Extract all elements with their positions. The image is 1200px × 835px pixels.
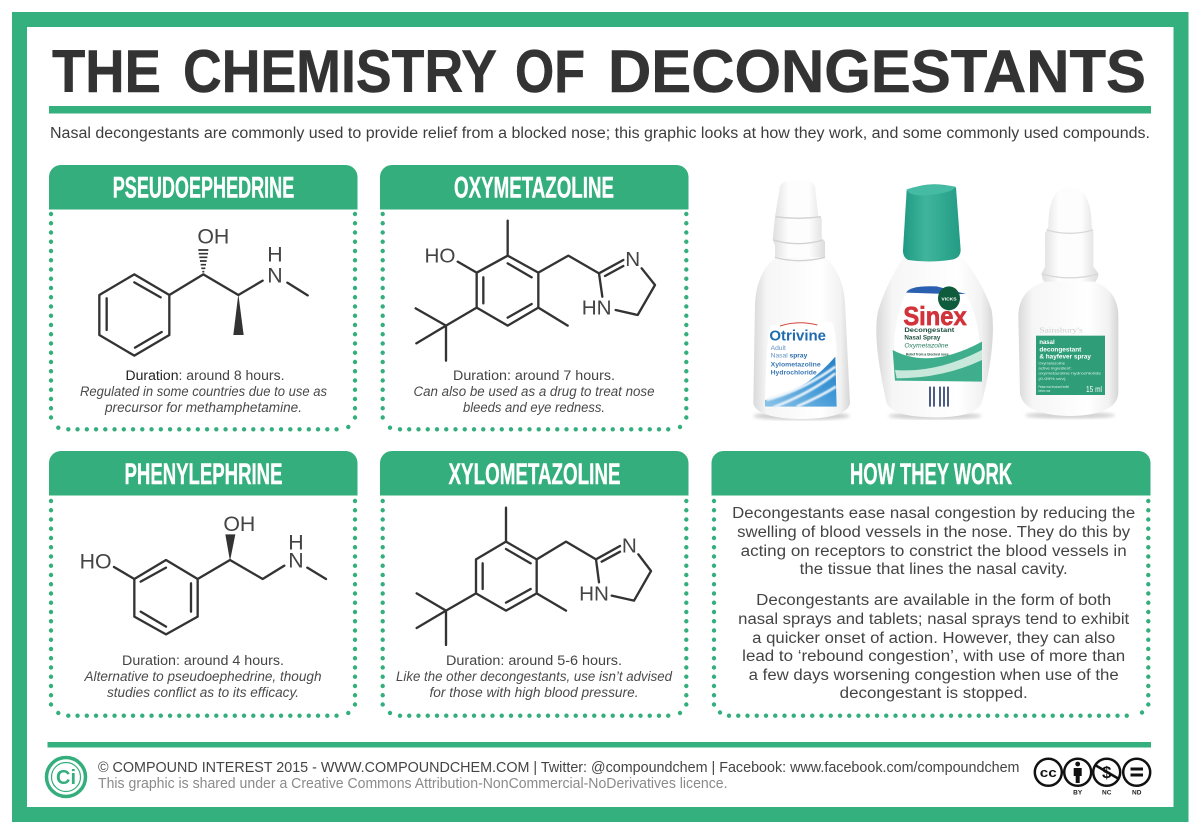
caption: phenylephrine: studies conflict as to its efficacy.: [107, 685, 299, 700]
molecule: phenylephrine: H: [288, 531, 304, 555]
heading: how they work: [712, 451, 1150, 496]
intro text: Nasal decongestants are commonly used to provide relief from a blocked nose; this graphic looks at how they work, and some commonly used compounds.: [50, 125, 1150, 142]
panel: oxymetazoline: [380, 165, 688, 429]
bottle: Otrivine: Otrivine: [769, 329, 826, 345]
heading: oxymetazoline: [380, 165, 688, 210]
panel: xylometazoline: [380, 451, 688, 716]
icon: nc: [1093, 759, 1120, 796]
icon: by: BY: [1073, 790, 1083, 796]
text block: how they work, paragraph 1: acting on receptors to constrict the blood vessels in: [741, 543, 1127, 560]
bottle: Sainsbury's: decongestant: [1039, 347, 1081, 353]
molecule: oxymetazoline: HN: [582, 297, 612, 320]
bottle: Otrivine: Hydrochloride: [771, 370, 817, 377]
bottle: Sinex: VICKS: [941, 297, 957, 303]
caption: pseudoephedrine: precursor for methamphetamine.: [104, 400, 302, 415]
bottle: Sainsbury's: & hayfever spray: [1039, 355, 1092, 361]
icon: nd: ND: [1132, 790, 1142, 796]
bottle: Sinex: Sinex: [903, 301, 967, 331]
icon: cc: cc: [1040, 765, 1057, 780]
caption: phenylephrine: [83, 653, 322, 700]
bottle: Sinex: Oxymetazoline: [904, 343, 949, 350]
text block: how they work, paragraph 1: the tissue that lines the nasal cavity.: [800, 561, 1068, 578]
caption: oxymetazoline: Duration: around 7 hours.: [453, 368, 615, 383]
title: OF: [515, 38, 585, 105]
footer credit line: © COMPOUND INTEREST 2015 - WWW.COMPOUNDCHEM.COM | Twitter: @compoundchem | Facebook: www.facebook.com/compoundchem: [98, 760, 1020, 776]
bottle: Sainsbury's: nasal: [1039, 340, 1055, 346]
bottle: Otrivine: Xylometazoline: [771, 362, 821, 369]
title: DECONGESTANTS: [608, 38, 1146, 105]
bottle: Sainsbury's: oxymetazoline hydrochloride: [1038, 371, 1102, 376]
molecule: pseudoephedrine: N: [267, 264, 283, 288]
title: CHEMISTRY: [183, 38, 497, 105]
bottle: Otrivine: Adult: [771, 345, 786, 352]
text block: how they work, paragraph 2: Decongestants are available in the form of both: [756, 592, 1111, 609]
bottle: Sinex: [876, 184, 993, 419]
caption: oxymetazoline: [414, 368, 654, 415]
bottle: Sinex: Nasal Spray: [904, 334, 941, 341]
heading: phenylephrine: PHENYLEPHRINE: [124, 458, 282, 491]
title rule: [49, 106, 1151, 114]
heading: how they work: HOW THEY WORK: [850, 458, 1012, 491]
heading: xylometazoline: XYLOMETAZOLINE: [448, 458, 620, 491]
text block: how they work, paragraph 1: Decongestants ease nasal congestion by reducing the: [732, 505, 1135, 522]
bottle: Sainsbury's: 15 ml: [1086, 384, 1102, 394]
caption: pseudoephedrine: [80, 368, 327, 415]
panel: how they work: [712, 451, 1150, 716]
text block: how they work, paragraph 1: [732, 505, 1135, 578]
bottle: Sainsbury's: (0.05% w/v): [1038, 376, 1067, 381]
bottle: Otrivine: [753, 180, 850, 420]
text block: how they work, paragraph 2: [738, 592, 1130, 702]
heading: pseudoephedrine: PSEUDOEPHEDRINE: [113, 172, 294, 204]
bottle: Sinex: Decongestant: [904, 327, 955, 334]
title: THE: [52, 38, 161, 105]
text block: how they work, paragraph 2: nasal sprays and tablets; nasal sprays tend to exhibit: [738, 611, 1130, 628]
caption: pseudoephedrine: Regulated in some countries due to use as: [80, 384, 327, 399]
footer rule: [48, 742, 1151, 748]
molecule: phenylephrine: N: [288, 549, 304, 573]
logo: Compound Interest: Ci: [56, 767, 76, 789]
caption: phenylephrine: Alternative to pseudoephedrine, though: [83, 669, 322, 684]
bottle: Sainsbury's: [1018, 187, 1118, 419]
icon: nc: $: [1102, 763, 1112, 782]
molecule: xylometazoline: HN: [579, 582, 609, 605]
molecule: phenylephrine: [80, 512, 326, 634]
footer licence line: This graphic is shared under a Creative Commons Attribution-NonCommercial-NoDerivatives licence.: [98, 776, 728, 792]
text block: how they work, paragraph 2: a few days worsening congestion when use of the: [749, 667, 1119, 684]
bottle: Sainsbury's: before use: [1038, 389, 1050, 393]
molecule: oxymetazoline: HO: [425, 245, 455, 268]
bottle: Sainsbury's: Oxymetazoline: [1038, 361, 1066, 366]
molecule: xylometazoline: [417, 508, 651, 645]
caption: phenylephrine: Duration: around 4 hours.: [122, 653, 284, 668]
text block: how they work, paragraph 2: lead to ‘rebound congestion’, with use of more than: [742, 648, 1125, 665]
icons: creative commons BY NC ND: [1035, 759, 1150, 796]
molecule: xylometazoline: N: [622, 534, 637, 557]
caption: xylometazoline: [396, 653, 672, 700]
caption: pseudoephedrine: Duration: around 8 hours.: [126, 368, 284, 383]
panel: pseudoephedrine: [49, 165, 358, 429]
bottle: Sainsbury's: active ingredient:: [1038, 366, 1072, 371]
logo: Compound Interest: [46, 758, 86, 796]
caption: oxymetazoline: Can also be used as a drug to treat nose: [414, 384, 654, 399]
caption: oxymetazoline: bleeds and eye redness.: [463, 400, 605, 415]
title: [52, 38, 1146, 105]
caption: xylometazoline: Like the other decongestants, use isn’t advised: [396, 669, 672, 684]
caption: xylometazoline: for those with high blood pressure.: [430, 685, 638, 700]
bottle: Sainsbury's: Sainsbury's: [1039, 327, 1083, 335]
molecule: oxymetazoline: N: [625, 248, 640, 271]
bottle: Sainsbury's: Please read enclosed leaflet: [1038, 385, 1069, 389]
photo: three nasal spray bottles: [753, 180, 1118, 420]
molecule: oxymetazoline: [416, 221, 655, 361]
bottle: Otrivine: Nasal spray: [771, 353, 808, 360]
molecule: pseudoephedrine: OH: [197, 224, 229, 248]
molecule: phenylephrine: OH: [223, 512, 255, 536]
panel: phenylephrine: [49, 451, 358, 716]
heading: xylometazoline: [380, 451, 688, 496]
text block: how they work, paragraph 2: a quicker onset of action. However, they can also: [752, 630, 1115, 647]
heading: oxymetazoline: OXYMETAZOLINE: [454, 172, 614, 204]
molecule: pseudoephedrine: [99, 224, 308, 356]
icon: nc: NC: [1102, 790, 1112, 796]
text block: how they work, paragraph 2: decongestant is stopped.: [840, 685, 1028, 702]
heading: phenylephrine: [49, 451, 358, 496]
heading: pseudoephedrine: [49, 165, 358, 210]
molecule: phenylephrine: HO: [80, 549, 112, 573]
molecule: pseudoephedrine: H: [267, 243, 283, 267]
caption: xylometazoline: Duration: around 5-6 hours.: [446, 653, 622, 668]
text block: how they work, paragraph 1: swelling of blood vessels in the nose. They do this by: [737, 524, 1130, 541]
bottle: Sinex: Relief from a blocked nose: [906, 351, 949, 356]
